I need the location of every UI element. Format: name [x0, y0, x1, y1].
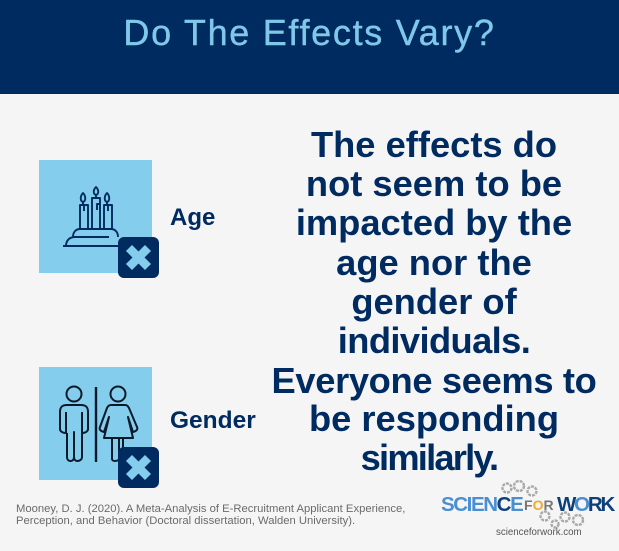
main statement	[272, 124, 596, 478]
logo wordmark: WORK	[557, 493, 613, 516]
logo url: scienceforwork.com	[496, 527, 582, 538]
main statement: not seem to be	[306, 163, 562, 204]
main statement: gender of	[351, 281, 517, 322]
main statement: similarly.	[361, 437, 497, 478]
icon: cake with candles	[63, 187, 121, 246]
title: Do The Effects Vary?	[123, 12, 496, 53]
label: gender: Gender	[170, 407, 256, 434]
main statement: The effects do	[311, 124, 557, 165]
citation: Perception, and Behavior (Doctoral dissertation, Walden University).	[16, 515, 355, 527]
main statement: impacted by the	[296, 202, 572, 243]
panel: age icon	[39, 160, 159, 278]
label: age: Age	[170, 204, 215, 231]
main statement: individuals.	[338, 320, 530, 361]
icon: restroom figures	[60, 386, 137, 462]
logo wordmark: SCIENCE	[441, 493, 522, 516]
logo wordmark: FOR	[524, 497, 554, 513]
header band	[0, 0, 619, 94]
logo: science for work	[441, 480, 615, 538]
main statement: age nor the	[336, 242, 532, 283]
logo wordmark	[441, 493, 615, 516]
citation	[16, 503, 405, 527]
citation: Mooney, D. J. (2020). A Meta-Analysis of E-Recruitment Applicant Experience,	[16, 503, 405, 515]
main statement: be responding	[309, 398, 559, 439]
icon: cross badge	[118, 447, 159, 488]
main statement: Everyone seems to	[272, 360, 596, 401]
icon: cross badge	[118, 237, 159, 278]
panel: gender icon	[39, 367, 159, 488]
logo gears	[501, 480, 584, 529]
